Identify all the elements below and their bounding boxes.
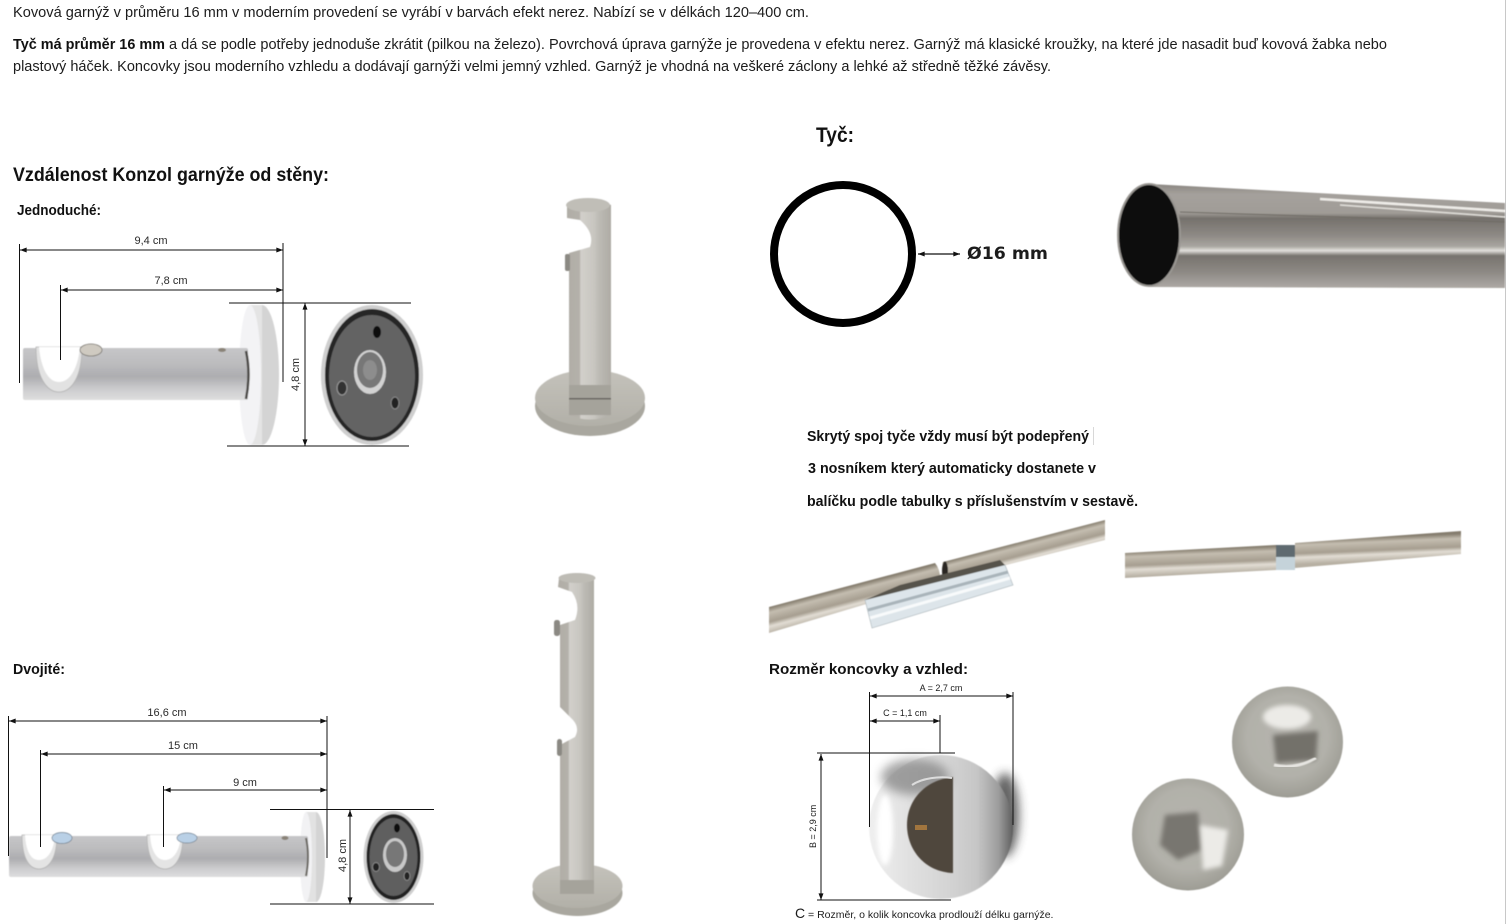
intro text block	[13, 5, 1387, 75]
subheading: end cap: Rozměr koncovky a vzhled:	[769, 662, 968, 678]
photo: open rod joint with connector	[769, 520, 1105, 633]
dimension labels: 15 cm	[168, 740, 198, 752]
intro text block: plastový háček. Koncovky jsou moderního vzhledu a dodávají garnýži velmi jemný vzhled. Garnýž je vhodná na veškeré záclony a lehké až středně těžké závěsy.	[13, 59, 1051, 75]
dimension lines	[20, 243, 411, 446]
note: hidden joint: Skrytý spoj tyče vždy musí být podepřený	[807, 429, 1089, 445]
diagram: double bracket with dimensions	[8, 707, 434, 904]
arrow: diameter	[918, 253, 960, 255]
dimension labels: 16,6 cm	[147, 707, 187, 719]
photo: single bracket upright	[535, 198, 645, 436]
dimension labels: 7,8 cm	[154, 275, 188, 287]
label: diameter: Ø16 mm	[967, 244, 1048, 264]
dimension labels: 9,4 cm	[134, 235, 168, 247]
dimension labels: 4,8 cm	[337, 839, 349, 872]
photo: double bracket base plate	[364, 811, 424, 903]
note: hidden joint	[807, 427, 1138, 510]
dimension labels	[147, 707, 349, 872]
photo: closed rod joint	[1125, 531, 1461, 585]
intro text block: a dá se podle potřeby jednoduše zkrátit (pilkou na železo). Povrchová úprava garnýže je provedena v efektu nerez. Garnýž má klasické kroužky, na které jde nasadit buď kovová žabka nebo	[169, 37, 1387, 53]
photo: double bracket upright	[532, 573, 622, 916]
page right border	[1505, 0, 1506, 924]
photo: upper ball	[1232, 686, 1343, 798]
intro text block: Kovová garnýž v průměru 16 mm v moderním provedení se vyrábí v barvách efekt nerez. Nabízí se v délkách 120–400 cm.	[13, 5, 809, 21]
photo: lower ball	[1132, 778, 1244, 890]
dimension labels: A = 2,7 cm	[920, 683, 962, 693]
photo: single bracket base plate	[321, 305, 423, 445]
photo: single bracket side view	[23, 305, 279, 445]
dimension labels: 9 cm	[233, 777, 257, 789]
photo: rod end	[1118, 184, 1505, 288]
dimension lines	[817, 692, 1013, 900]
subheading: single brackets: Jednoduché:	[17, 203, 101, 219]
photo: end cap balls	[1132, 686, 1343, 890]
dimension labels: B = 2,9 cm	[808, 805, 818, 848]
dimension lines	[8, 716, 434, 904]
heading: bracket distance: Vzdálenost Konzol garnýže od stěny:	[13, 165, 329, 186]
intro text block: Tyč má průměr 16 mm	[13, 37, 165, 53]
dimension labels: C = 1,1 cm	[883, 708, 927, 718]
photo: end cap ball	[869, 755, 1019, 899]
note: hidden joint: balíčku podle tabulky s příslušenstvím v sestavě.	[807, 494, 1138, 510]
icon: ring cross-section	[774, 185, 912, 323]
dimension labels: 4,8 cm	[290, 358, 302, 391]
diagram: end cap with dimensions	[795, 683, 1053, 921]
photo: double bracket side view	[9, 812, 325, 902]
diagram: single bracket with dimensions	[20, 235, 423, 446]
dimension labels	[134, 235, 302, 391]
diagram: rod cross-section 16 mm	[774, 185, 1048, 323]
note: hidden joint: 3 nosníkem který automaticky dostanete v	[808, 461, 1096, 477]
caption: C meaning: C = Rozměr, o kolik koncovka prodlouží délku garnýže.	[795, 905, 1053, 921]
heading: Tyč: Tyč:	[816, 124, 854, 147]
dimension labels	[808, 683, 962, 848]
subheading: double brackets: Dvojité:	[13, 662, 65, 678]
